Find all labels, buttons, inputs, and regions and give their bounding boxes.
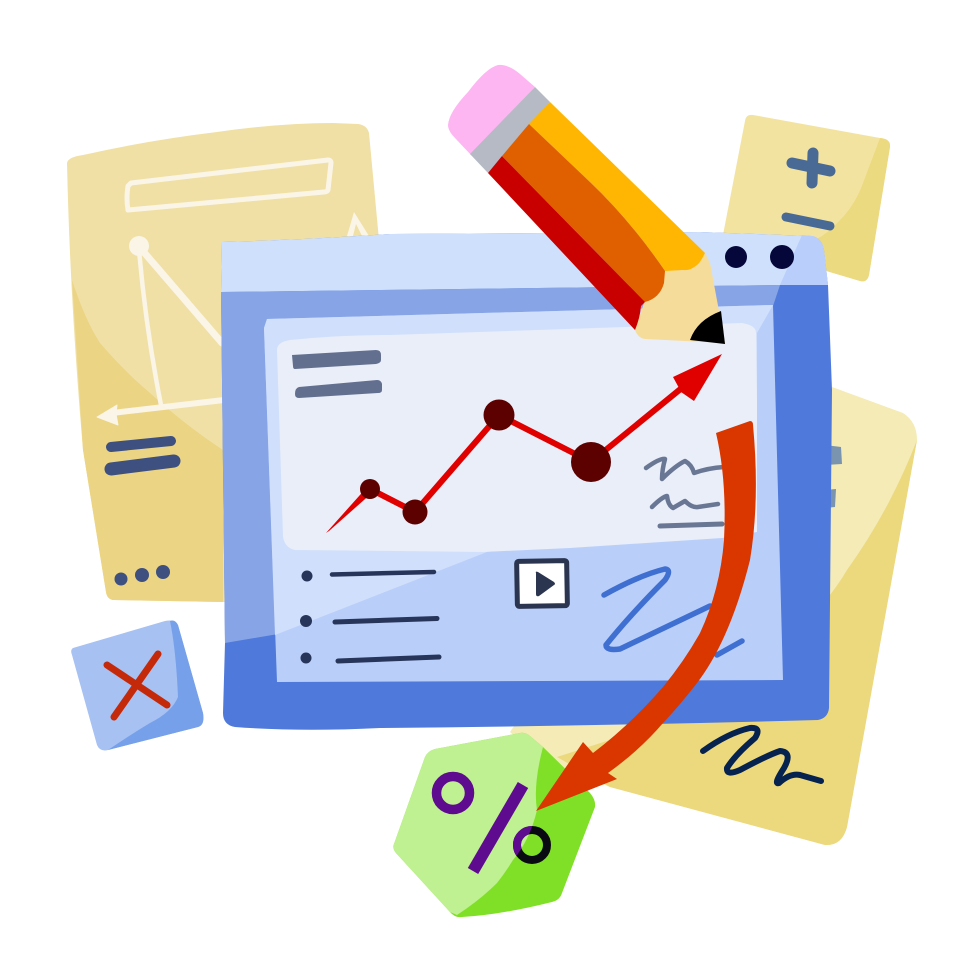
window dots xyxy=(725,245,794,269)
icon: percent tag xyxy=(393,733,595,917)
header right facet xyxy=(780,235,828,285)
percent ring right xyxy=(517,830,547,860)
signature xyxy=(703,728,821,783)
pencil ferrule xyxy=(470,87,550,173)
panel: left document xyxy=(67,123,379,602)
icon: cross xyxy=(107,654,167,717)
right document shaded area xyxy=(557,440,917,845)
percent ring left xyxy=(436,776,470,810)
chart node 4 xyxy=(571,442,611,482)
document line chart xyxy=(97,212,369,425)
tag light face xyxy=(393,733,543,915)
percent slash xyxy=(473,785,523,871)
list items xyxy=(300,570,439,664)
chart node 1 xyxy=(360,479,380,499)
pencil yellow side xyxy=(529,102,705,271)
window side band xyxy=(221,285,780,643)
play button xyxy=(517,561,567,606)
illustration xyxy=(67,64,917,918)
window content panel xyxy=(264,305,783,682)
window header xyxy=(221,232,828,292)
document shaded corner xyxy=(72,280,223,602)
blue scribble xyxy=(604,569,742,655)
icon: minus xyxy=(786,217,830,226)
chart heading bars xyxy=(292,350,382,398)
panel: x note xyxy=(71,620,203,750)
icon: plus xyxy=(792,153,830,183)
panel: browser window xyxy=(221,232,832,730)
pencil eraser xyxy=(448,65,535,155)
right document hidden bars xyxy=(825,445,842,508)
curved arrow xyxy=(536,421,756,811)
handwritten notes xyxy=(646,459,724,526)
chart node 2 xyxy=(402,500,428,524)
document text bars xyxy=(111,441,174,469)
percent ring right purple part xyxy=(513,826,532,856)
chart arrow head xyxy=(673,354,722,401)
panel: plus minus note xyxy=(722,115,890,281)
note shaded fold xyxy=(815,138,890,281)
line chart xyxy=(326,354,722,533)
x note fold xyxy=(108,620,203,750)
panel: right document xyxy=(510,387,917,845)
chart area xyxy=(277,323,757,552)
pencil orange side xyxy=(502,124,665,302)
chart node 3 xyxy=(484,400,514,430)
pencil lead xyxy=(690,311,725,344)
pencil red side xyxy=(488,156,645,330)
document title box xyxy=(127,160,331,210)
document dots xyxy=(114,565,170,586)
content light facet xyxy=(264,305,773,635)
pencil wood xyxy=(635,253,725,343)
pencil xyxy=(448,65,725,344)
